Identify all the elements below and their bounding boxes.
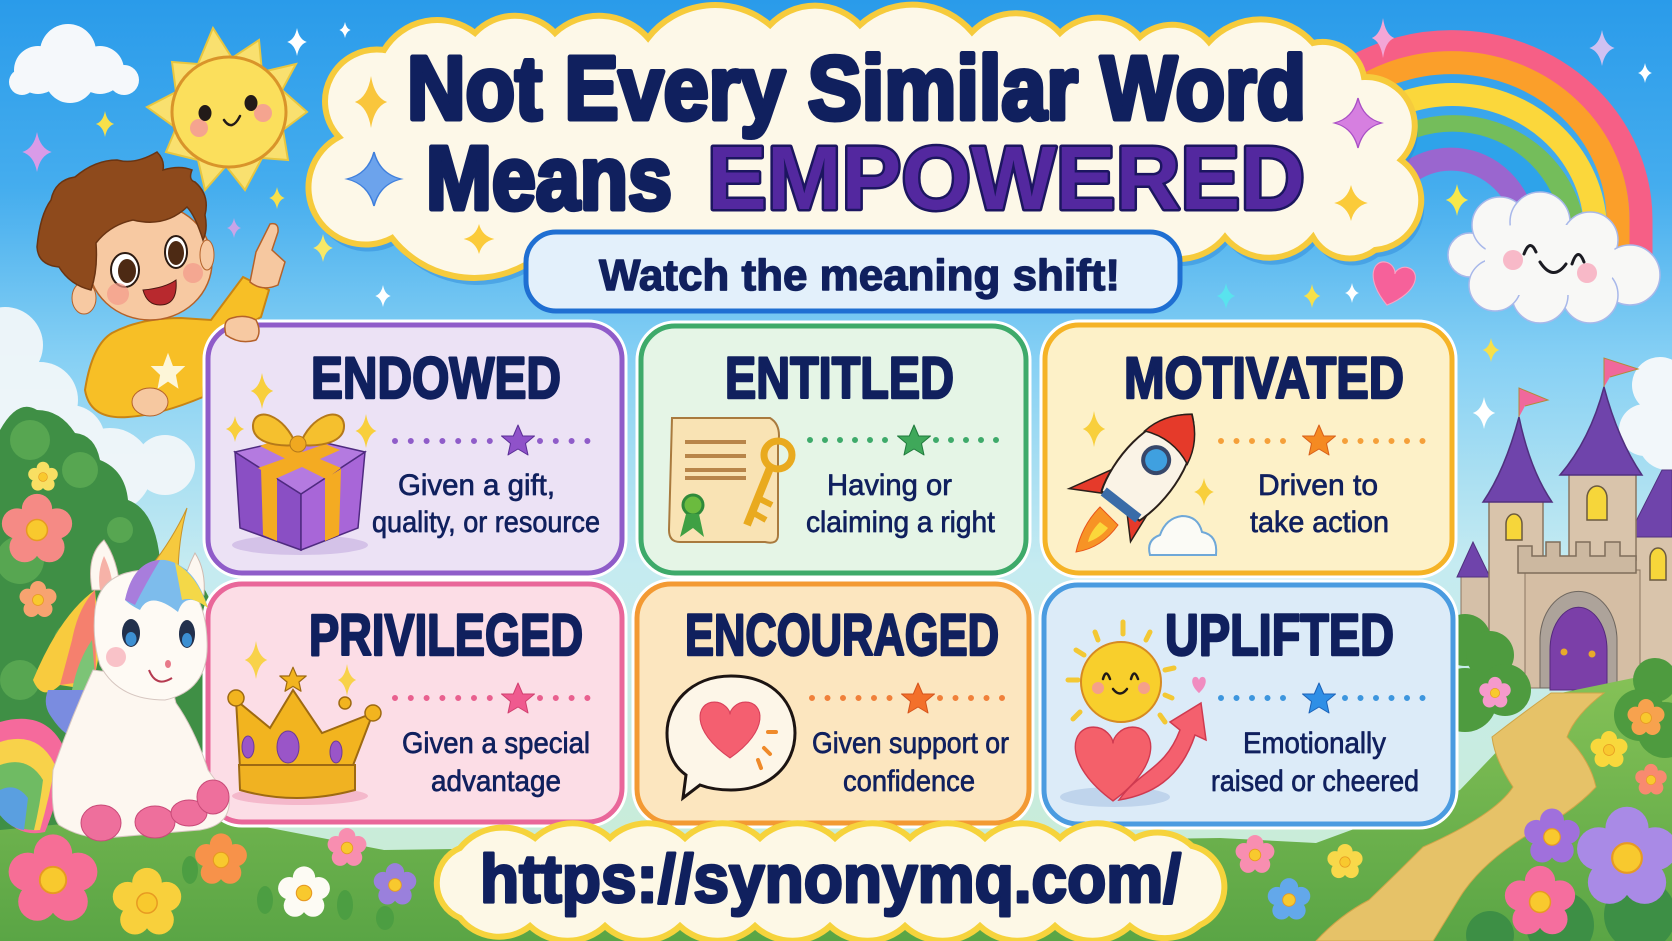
cloud cheeks [1503, 250, 1597, 283]
right bushes by castle [1433, 614, 1672, 758]
flowers on left bush [2, 462, 72, 617]
icon: rocket [1067, 383, 1216, 555]
star on hoodie [151, 353, 185, 389]
hooves [81, 780, 229, 841]
castle right tower [1636, 535, 1672, 690]
card: MOTIVATED [1045, 325, 1452, 573]
meadow flowers left [9, 828, 416, 934]
card: MOTIVATED: take action [1250, 506, 1389, 539]
flag center [1604, 358, 1638, 387]
cloud: left background [0, 307, 195, 512]
icon: title sparkle bottom [464, 224, 494, 254]
icon: speech bubble heart [667, 676, 795, 798]
divider with star [1221, 683, 1424, 713]
definition: Given a gift, [398, 469, 555, 502]
card: ENDOWED [208, 325, 622, 573]
castle center tower [1569, 470, 1636, 560]
castle left tower [1489, 497, 1543, 687]
sun [147, 28, 307, 190]
card: PRIVILEGED: advantage [431, 765, 561, 798]
castle keep [1525, 570, 1640, 688]
icon: title sparkle right yellow [1334, 185, 1368, 221]
title line 2: Means: Means [426, 129, 672, 229]
battlements [1518, 542, 1636, 573]
title line 2: EMPOWERED: EMPOWERED [707, 129, 1305, 229]
tail [0, 719, 67, 833]
sun cheeks [190, 104, 272, 137]
definition: Given a special [402, 727, 590, 760]
definition: Having or [827, 469, 952, 502]
sun face disc [172, 57, 286, 167]
cloud: right background [1619, 357, 1672, 470]
castle [1457, 358, 1672, 690]
heading: ENDOWED [311, 346, 561, 411]
mouth [143, 280, 176, 305]
lower hand [132, 388, 168, 416]
cheeks [107, 263, 203, 305]
winding golden path [1316, 693, 1604, 941]
icon: sun rays [147, 28, 307, 190]
mane [33, 590, 100, 692]
icon: title sparkle purple [1334, 98, 1382, 148]
subtitle text: Watch the meaning shift! [599, 251, 1120, 300]
card: ENTITLED [641, 326, 1026, 573]
flag left [1519, 388, 1548, 417]
ear [72, 282, 96, 314]
door [1550, 607, 1607, 690]
eyes [111, 236, 187, 287]
ground: right hill and left meadow [0, 614, 1672, 941]
forelock [125, 560, 208, 612]
headline cloud [308, 5, 1424, 285]
title line 1: Not Every Similar Word [407, 39, 1306, 139]
gate arch [1540, 591, 1617, 688]
divider with star [810, 425, 1002, 455]
heading: ENTITLED [725, 346, 954, 411]
unicorn [0, 508, 229, 841]
url cloud [437, 823, 1224, 941]
ears [90, 540, 120, 590]
subtitle pill [526, 232, 1180, 311]
boy's hand on card [225, 316, 259, 342]
definition: Given support or [812, 727, 1009, 760]
rainbow [1262, 42, 1641, 262]
heading: ENCOURAGED [685, 603, 999, 668]
card: ENCOURAGED: confidence [843, 765, 975, 798]
card: ENTITLED: claiming a right [806, 506, 996, 539]
heading: MOTIVATED [1124, 346, 1404, 411]
card: PRIVILEGED [208, 584, 622, 822]
definition: Emotionally [1243, 727, 1386, 760]
icon: sun and rising heart [1060, 622, 1206, 807]
head [94, 570, 207, 700]
icon: title sparkle left blue [347, 152, 401, 206]
divider with star [812, 683, 1003, 713]
cloud: top left [9, 24, 139, 103]
icon: title sparkle left yellow [355, 76, 387, 128]
body [52, 670, 229, 838]
heading: UPLIFTED [1165, 603, 1394, 668]
icon: pink heart [1366, 260, 1418, 310]
card: UPLIFTED [1044, 585, 1453, 824]
eyes [122, 619, 195, 648]
boy character [37, 152, 285, 417]
right bottom bush [1466, 879, 1672, 941]
pointing hand [250, 224, 285, 288]
meadow flowers right [1236, 677, 1672, 934]
divider with star [395, 683, 600, 713]
castle windows [1506, 486, 1666, 580]
cloud eyes and smile [1524, 245, 1584, 273]
cheek and smile [106, 647, 126, 667]
card: UPLIFTED: raised or cheered [1211, 765, 1419, 798]
heading: PRIVILEGED [309, 603, 583, 668]
sun smile [224, 116, 240, 125]
ear right [200, 240, 214, 270]
castle left small tower [1461, 572, 1491, 642]
hair [37, 152, 206, 290]
card: ENCOURAGED [637, 584, 1029, 823]
smiling cloud [1448, 192, 1660, 323]
word cards grid [208, 325, 1453, 824]
sparkles in sky [22, 18, 1652, 429]
icon: crown [228, 641, 381, 805]
head [88, 204, 212, 320]
icon: scroll and key [669, 418, 792, 543]
divider with star [1221, 425, 1426, 455]
left bush [0, 407, 210, 830]
definition: Driven to [1258, 469, 1378, 502]
divider with star [395, 425, 600, 455]
hoodie body [85, 277, 269, 417]
horn [152, 508, 187, 578]
sun eyes [198, 95, 258, 121]
card: ENDOWED: quality, or resource [372, 506, 600, 539]
icon: gift box [226, 373, 376, 555]
url text: https://synonymq.com/ [480, 841, 1181, 917]
